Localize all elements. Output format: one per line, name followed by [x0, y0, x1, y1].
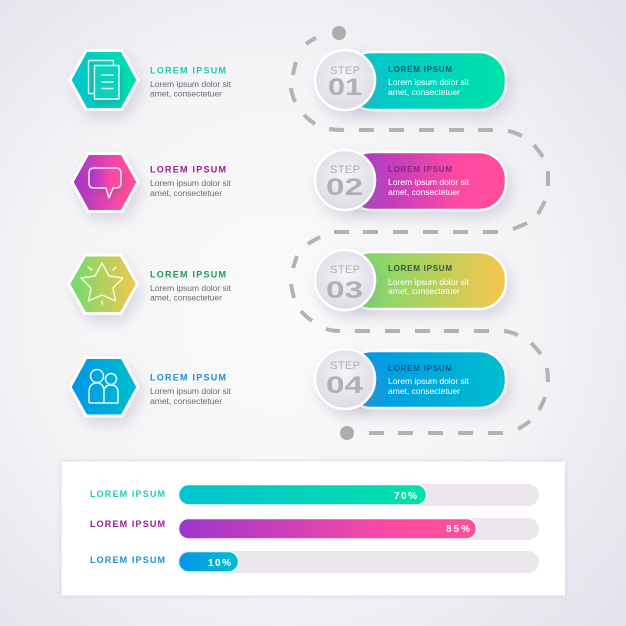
- value 1: 70%: [394, 491, 417, 502]
- hexagon 1: [70, 50, 138, 110]
- step label 3: STEP: [330, 264, 360, 276]
- value 3: 10%: [208, 558, 231, 569]
- pill text 2: Lorem ipsum dolor sit: [388, 177, 470, 187]
- step 4: [315, 349, 506, 409]
- text 1: amet, consectetuer: [150, 88, 222, 98]
- step number 3: 03: [326, 277, 363, 304]
- bar label 2: LOREM IPSUM: [90, 519, 165, 529]
- step label 1: STEP: [330, 65, 360, 77]
- bar row 2: [90, 518, 539, 540]
- track 1: [178, 484, 539, 506]
- pill heading 4: LOREM IPSUM: [388, 364, 452, 373]
- dashed route path: [291, 38, 548, 433]
- step label 4: STEP: [330, 360, 360, 372]
- pill 3: [345, 252, 506, 309]
- fill 2: [178, 518, 476, 539]
- pill text 4: [388, 376, 470, 396]
- text 1: Lorem ipsum dolor sit: [150, 79, 232, 89]
- pill text 3: Lorem ipsum dolor sit: [388, 277, 470, 287]
- pill 2: [345, 152, 506, 210]
- fill 3: [178, 552, 238, 572]
- pill text 2: [388, 177, 470, 197]
- fill 1: [178, 484, 426, 505]
- hexagon 3: [68, 255, 138, 314]
- hexagon item 4: people: [70, 358, 232, 416]
- pill heading 3: LOREM IPSUM: [388, 264, 452, 273]
- pill text 1: Lorem ipsum dolor sit: [388, 77, 470, 87]
- step 1: [315, 50, 506, 110]
- pill 1: [345, 52, 506, 110]
- pill text 1: [388, 77, 470, 97]
- step number 1: 01: [328, 74, 362, 101]
- pill 4: [345, 351, 506, 408]
- badge 2: [315, 150, 375, 210]
- pill text 3: [388, 277, 470, 296]
- bar row 1: [90, 484, 539, 506]
- icon: speech bubble: [89, 168, 121, 198]
- step label 2: STEP: [330, 164, 360, 176]
- text 2: amet, consectetuer: [150, 188, 222, 198]
- icon: people: [89, 370, 118, 403]
- pill text 2: amet, consectetuer: [388, 187, 460, 197]
- hexagon 2: [72, 154, 138, 212]
- text 2: [150, 178, 232, 198]
- start dot: [332, 26, 346, 40]
- step 3: [315, 250, 506, 310]
- hexagon item 2: speech bubble: [72, 154, 232, 212]
- hexagon item 1: documents: [70, 50, 232, 110]
- panel: progress bars: [62, 462, 565, 596]
- bar row 3: [90, 551, 539, 573]
- step number 2: 02: [326, 174, 363, 201]
- pill text 4: amet, consectetuer: [388, 386, 460, 396]
- heading 4: LOREM IPSUM: [150, 372, 226, 382]
- bar label 1: LOREM IPSUM: [90, 489, 165, 499]
- track 2: [178, 518, 539, 540]
- icon: star: [81, 263, 123, 304]
- text 3: amet, consectetuer: [150, 292, 222, 302]
- track 3: [178, 551, 539, 573]
- badge 3: [315, 250, 375, 310]
- text 3: [150, 283, 232, 302]
- step number 4: 04: [326, 372, 364, 399]
- step 2: [315, 150, 506, 210]
- icon: documents: [88, 60, 119, 99]
- text 1: [150, 79, 232, 98]
- text 2: Lorem ipsum dolor sit: [150, 178, 232, 188]
- value 2: 85%: [446, 524, 470, 535]
- heading 3: LOREM IPSUM: [150, 270, 226, 280]
- end dot: [340, 426, 354, 440]
- panel background: [62, 462, 565, 596]
- heading 2: LOREM IPSUM: [150, 164, 226, 174]
- hexagon item 3: star: [68, 255, 232, 314]
- bar label 3: LOREM IPSUM: [90, 555, 165, 565]
- pill heading 1: LOREM IPSUM: [388, 65, 452, 74]
- text 4: amet, consectetuer: [150, 396, 222, 406]
- pill text 3: amet, consectetuer: [388, 286, 460, 296]
- text 4: [150, 386, 232, 406]
- pill heading 2: LOREM IPSUM: [388, 165, 452, 174]
- badge 1: [315, 50, 375, 110]
- text 4: Lorem ipsum dolor sit: [150, 386, 232, 396]
- pill text 4: Lorem ipsum dolor sit: [388, 376, 470, 386]
- badge 4: [315, 349, 375, 409]
- hexagon 4: [70, 358, 138, 416]
- pill text 1: amet, consectetuer: [388, 87, 460, 97]
- text 3: Lorem ipsum dolor sit: [150, 283, 232, 293]
- heading 1: LOREM IPSUM: [150, 66, 226, 76]
